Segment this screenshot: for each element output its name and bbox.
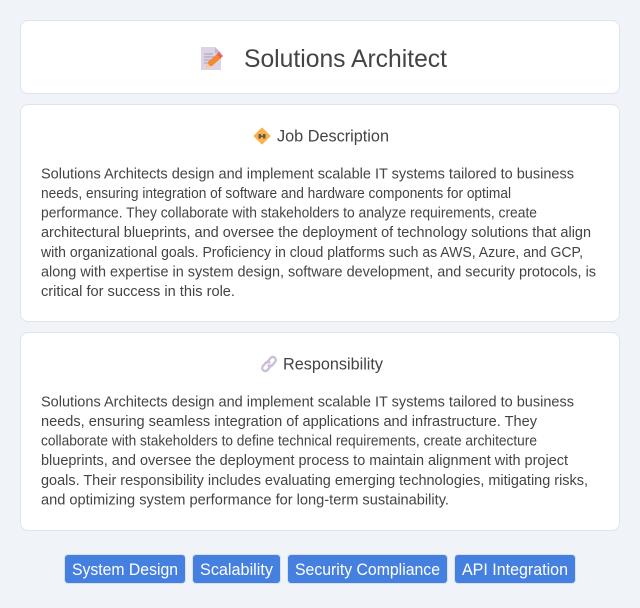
- text block: responsibility: Solutions Architects design and implement scalable IT systems tailored to business: [41, 394, 574, 410]
- text block: job description: performance. They collaborate with stakeholders to analyze requirements, create: [41, 206, 537, 222]
- heading: responsibility: Responsibility: [283, 356, 384, 374]
- text block: responsibility: blueprints, and oversee the deployment process to maintain alignment with project: [41, 453, 568, 469]
- panel: responsibility: [20, 332, 620, 531]
- tag: Scalability: Scalability: [200, 561, 274, 579]
- text block: job description: along with expertise in system design, software development, and security protocols, is: [41, 264, 596, 280]
- tag: Security Compliance: Security Compliance: [295, 561, 440, 579]
- text block: job description: needs, ensuring integration of software and hardware components for optimal: [41, 186, 511, 202]
- icon: link: [261, 356, 277, 372]
- tag: Security Compliance: [287, 554, 448, 584]
- text block: responsibility: [41, 394, 588, 508]
- tag: API Integration: API Integration: [462, 561, 568, 579]
- text block: responsibility: and optimizing system performance for long-term sustainability.: [41, 492, 449, 508]
- text block: job description: [40, 166, 596, 300]
- text block: responsibility: goals. Their responsibility includes evaluating emerging technologies, mitigating risks,: [41, 473, 588, 489]
- heading: job description: Job Description: [277, 128, 389, 146]
- tag: API Integration: [454, 554, 576, 584]
- text block: job description: critical for success in this role.: [41, 284, 235, 300]
- icon: memo with pencil: [201, 47, 223, 70]
- text block: job description: Solutions Architects design and implement scalable IT systems tailored to business: [41, 166, 574, 182]
- text block: job description: architectural blueprints, and oversee the deployment of technology solutions that align: [41, 225, 591, 241]
- text block: responsibility: needs, ensuring seamless integration of applications and infrastructure. They: [41, 414, 538, 430]
- panel: job description: [20, 104, 620, 322]
- text block: responsibility: collaborate with stakeholders to define technical requirements, create architecture: [41, 434, 537, 450]
- tag: Scalability: [192, 554, 281, 584]
- panel: header: [20, 20, 620, 94]
- tag: System Design: [64, 554, 186, 584]
- text block: job description: with organizational goals. Proficiency in cloud platforms such as AWS, Azure, and GCP,: [40, 245, 583, 261]
- title: Solutions Architect: [244, 45, 447, 73]
- icon: orange diamond: [254, 128, 270, 144]
- tag: System Design: System Design: [72, 561, 178, 579]
